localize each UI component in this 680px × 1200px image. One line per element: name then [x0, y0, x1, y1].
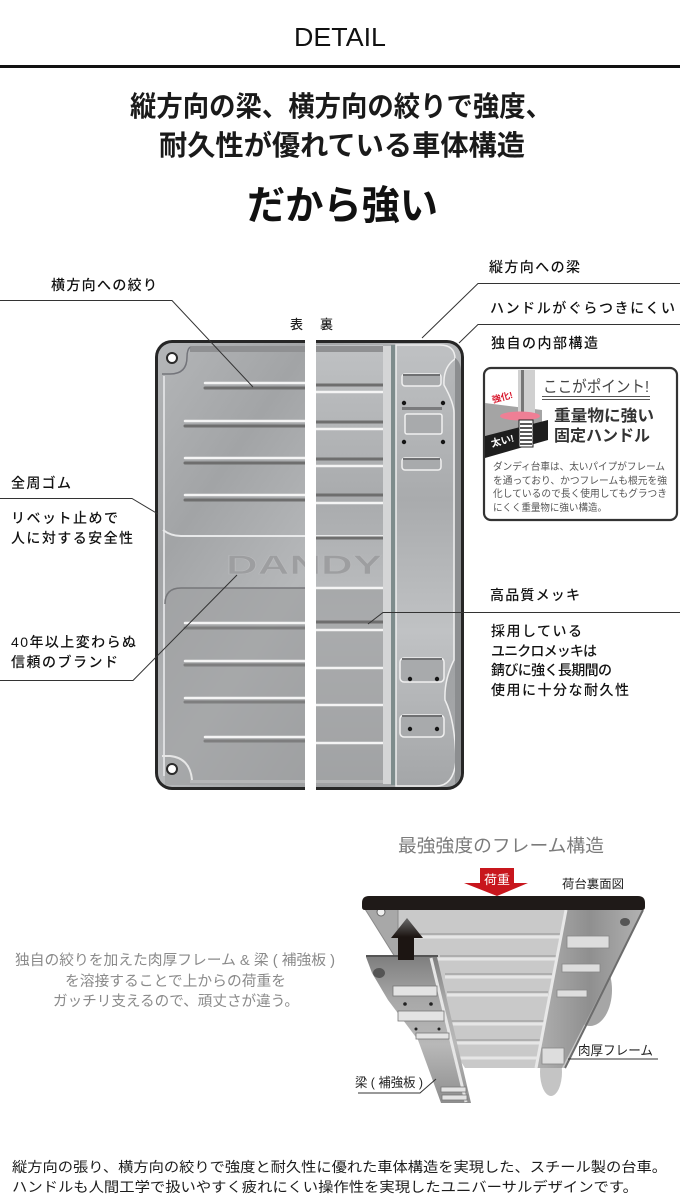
- annotation: plating description: 使用に十分な耐久性: [491, 682, 629, 698]
- annotation: rubber edge: [0, 475, 158, 514]
- summary text: [12, 1159, 667, 1195]
- reinforcing beam: [383, 345, 461, 786]
- annotation: rivet safety: 人に対する安全性: [11, 530, 133, 546]
- annotation: rubber edge: 全周ゴム: [11, 475, 71, 491]
- annotation: handle stability: ハンドルがぐらつきにくい: [490, 300, 675, 316]
- right frame: [536, 910, 643, 1068]
- callout: fixed handle: 重量物に強い: [554, 407, 654, 425]
- icon: handle illustration: 太い!: [490, 432, 515, 450]
- dark rubber bar: [362, 896, 645, 910]
- front back split: [305, 335, 316, 795]
- frame structure title: 最強強度のフレーム構造: [398, 836, 604, 856]
- rear wheel: [568, 954, 612, 1026]
- annotation: vertical beam: 縦方向への梁: [489, 259, 580, 275]
- frame structure description: [15, 952, 335, 1010]
- annotation: plating: [368, 587, 680, 624]
- frame structure description: 独自の絞りを加えた肉厚フレーム & 梁 ( 補強板 ): [15, 952, 335, 969]
- annotation: internal structure: 独自の内部構造: [491, 335, 598, 351]
- frame structure description: ガッチリ支えるので、頑丈さが違う。: [53, 993, 299, 1010]
- headline: [130, 91, 552, 161]
- label: thick frame: 肉厚フレーム: [578, 1043, 653, 1058]
- annotation: plating description: 錆びに強く長期間の: [491, 662, 612, 678]
- annotation: plating description: [491, 623, 629, 698]
- callout: fixed handle: ダンディ台車は、太いパイプがフレーム: [493, 460, 665, 473]
- callout: fixed handle: にくく重量物に強い構造。: [493, 501, 607, 514]
- lower panel step: [165, 588, 383, 785]
- callout: fixed handle: ここがポイント!: [543, 378, 649, 396]
- callout: fixed handle: [484, 368, 677, 520]
- embossed logo: DANDY: [226, 550, 382, 580]
- left beam: [366, 957, 471, 1103]
- annotation: horizontal drawing: 横方向への絞り: [51, 277, 157, 293]
- callout: fixed handle: を通っており、かつフレームも根元を強: [493, 474, 667, 487]
- summary text: 縦方向の張り、横方向の絞りで強度と耐久性に優れた車体構造を実現した、スチール製の台車。: [12, 1159, 667, 1175]
- frame diagram: [355, 868, 658, 1103]
- cart deck plate: [155, 335, 464, 795]
- deck underside: [365, 909, 643, 1068]
- annotation: trusted brand: [0, 575, 237, 680]
- front and back labels: 表: [290, 317, 303, 332]
- section header: DETAIL: DETAIL: [294, 22, 386, 52]
- callout: fixed handle: 固定ハンドル: [554, 427, 650, 445]
- annotation: handle stability: [459, 300, 680, 343]
- corner ears: [162, 347, 190, 374]
- front and back labels: 裏: [320, 317, 333, 332]
- annotation: vertical beam: [422, 259, 680, 338]
- headline: 縦方向の梁、横方向の絞りで強度、: [130, 91, 552, 122]
- annotation: rivet safety: リベット止めで: [11, 510, 118, 526]
- label: beam: 梁 ( 補強板 ): [355, 1075, 423, 1090]
- callout: fixed handle: 化しているので長く使用してもグラつき: [493, 487, 667, 500]
- annotation: plating description: ユニクロメッキは: [491, 643, 597, 659]
- label: deck underside: 荷台裏面図: [562, 876, 624, 891]
- icon: handle illustration: [485, 370, 548, 458]
- headline: 耐久性が優れている車体構造: [159, 129, 525, 161]
- arrow: load: [464, 868, 528, 896]
- steel surface: [158, 343, 461, 787]
- annotation: trusted brand: 40年以上変わらぬ: [11, 634, 136, 650]
- summary text: ハンドルも人間工学で扱いやすく疲れにくい操作性を実現したユニバーサルデザインです。: [12, 1179, 638, 1195]
- annotation: trusted brand: 信頼のブランド: [11, 654, 118, 670]
- headline emphasis: だから強い: [247, 184, 438, 228]
- icon: handle illustration: 強化!: [491, 389, 514, 405]
- rubber edge: [155, 340, 464, 790]
- arrow: load: 荷重: [484, 872, 510, 887]
- back ribs: [316, 385, 383, 743]
- annotation: plating description: 採用している: [491, 623, 582, 639]
- annotation: plating: 高品質メッキ: [490, 587, 580, 603]
- frame structure description: を溶接することで上からの荷重を: [65, 973, 286, 990]
- front and back labels: [290, 317, 333, 332]
- front ribs: [185, 383, 305, 741]
- mounting holes: [167, 352, 450, 774]
- arrow: upward force: [391, 918, 423, 960]
- annotation: horizontal drawing: [0, 277, 253, 387]
- section header: DETAIL: [0, 22, 680, 68]
- annotation: rivet safety: [11, 510, 133, 546]
